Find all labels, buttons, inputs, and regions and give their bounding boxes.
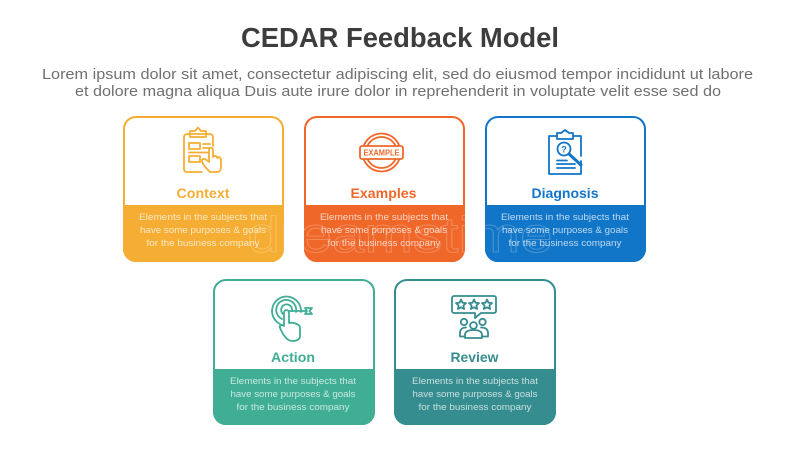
description (412, 376, 538, 413)
icon: star review with people (452, 296, 496, 338)
subtitle (42, 66, 753, 100)
icon: target with hand (272, 297, 312, 341)
subtitle: Lorem ipsum dolor sit amet, consectetur adipiscing elit, sed do eiusmod tempor incididunt ut labore (42, 66, 753, 83)
subtitle: et dolore magna aliqua Duis aute irure dolor in reprehenderit in voluptate velit esse sed do (75, 83, 721, 100)
description: for the business company (236, 402, 350, 413)
description (139, 212, 267, 249)
watermark: dreamstime (248, 207, 552, 263)
label: Review (450, 349, 499, 365)
description: have some purposes & goals (140, 225, 266, 236)
description: Elements in the subjects that (412, 376, 538, 387)
icon: clipboard with hand (184, 128, 221, 172)
description (230, 376, 356, 413)
description: for the business company (146, 238, 260, 249)
panel: review (394, 280, 556, 425)
panel: action (213, 280, 375, 425)
label: Context (176, 185, 230, 201)
description: have some purposes & goals (502, 225, 628, 236)
title: CEDAR Feedback Model (241, 22, 559, 53)
panel: diagnosis (485, 117, 646, 262)
description: have some purposes & goals (321, 225, 447, 236)
panel: examples (304, 117, 465, 262)
description: for the business company (418, 402, 532, 413)
description: Elements in the subjects that (139, 212, 267, 223)
panel: context (123, 117, 284, 262)
label: Examples (350, 185, 417, 201)
description: Elements in the subjects that (320, 212, 448, 223)
label: Diagnosis (532, 185, 599, 201)
description: have some purposes & goals (412, 389, 538, 400)
description (501, 212, 629, 249)
label: Action (271, 349, 315, 365)
description: Elements in the subjects that (230, 376, 356, 387)
description: have some purposes & goals (230, 389, 356, 400)
icon: example stamp (360, 134, 403, 172)
icon: clipboard with magnifier: ? (561, 144, 567, 154)
icon: example stamp: EXAMPLE (364, 148, 400, 158)
description: for the business company (508, 238, 622, 249)
description: for the business company (328, 238, 441, 249)
description: Elements in the subjects that (501, 212, 629, 223)
icon: clipboard with magnifier (549, 130, 581, 174)
description (320, 212, 448, 249)
